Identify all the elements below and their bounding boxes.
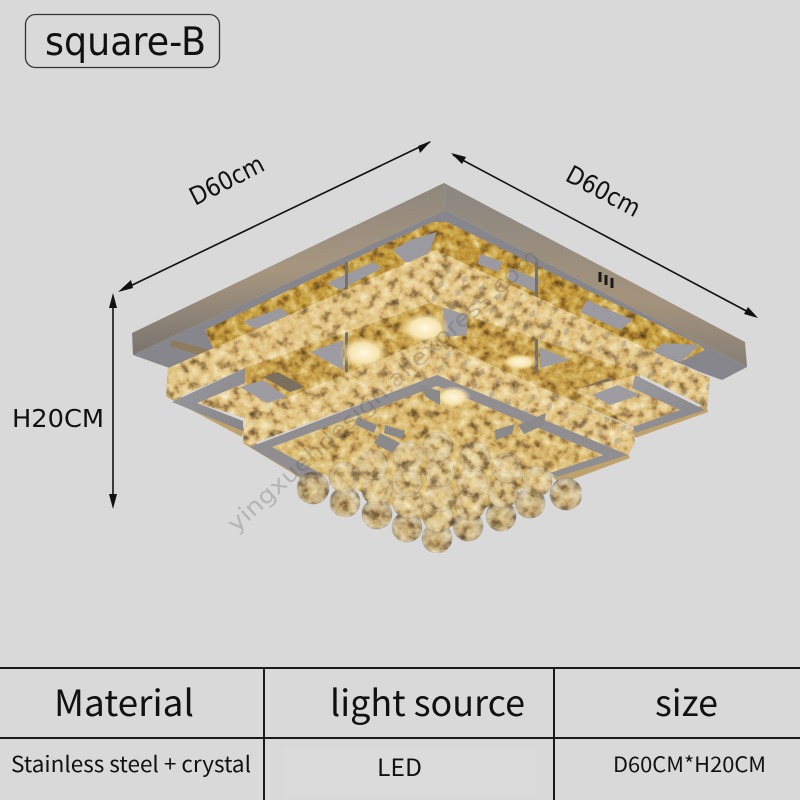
ceiling plate right strip	[444, 183, 747, 367]
header: Material: Material	[54, 675, 194, 727]
vent slots	[600, 272, 612, 288]
back crystal ring	[205, 222, 705, 362]
ceiling plate underside	[133, 210, 747, 380]
dimension label: D60cm left: D60cm	[185, 149, 269, 211]
dimension label: H20CM: H20CM	[12, 404, 104, 433]
chandelier illustration	[132, 183, 747, 553]
ceiling plate left strip	[132, 183, 445, 355]
arrow: width dimension left	[118, 141, 431, 292]
LED cell shading	[284, 746, 536, 796]
glowing bulbs	[340, 312, 538, 370]
left bracket	[170, 340, 210, 357]
dimension label: D60cm right: D60cm	[561, 160, 645, 223]
lower bulb glow	[435, 386, 471, 408]
watermark: yingxuehdesign.aliexpress.com	[223, 244, 545, 537]
outer crystal ring	[166, 250, 710, 438]
chrome gaps in inner panel	[356, 385, 546, 453]
header: light source: light source	[330, 675, 525, 727]
dark reflector strips	[263, 372, 615, 395]
cell: material value: Stainless steel + crystal	[11, 747, 251, 779]
arrow: depth dimension right	[451, 153, 758, 318]
arrow: height dimension	[109, 293, 117, 509]
cell: light source value: LED	[377, 748, 422, 783]
header: size: size	[655, 675, 718, 727]
suspension rods	[345, 262, 538, 372]
chrome inner rim	[250, 375, 628, 482]
spec table	[0, 668, 800, 800]
inner crystal panel	[272, 386, 603, 530]
back ring windows	[243, 232, 700, 362]
cell: size value: D60CM*H20CM	[613, 749, 766, 779]
table rules	[0, 668, 800, 800]
middle crystal ring	[243, 338, 635, 484]
crystal ball cluster	[297, 432, 582, 553]
inner windows	[310, 307, 640, 405]
variant label: square-B: square-B	[45, 20, 206, 65]
outer ring inner gold	[240, 295, 640, 430]
